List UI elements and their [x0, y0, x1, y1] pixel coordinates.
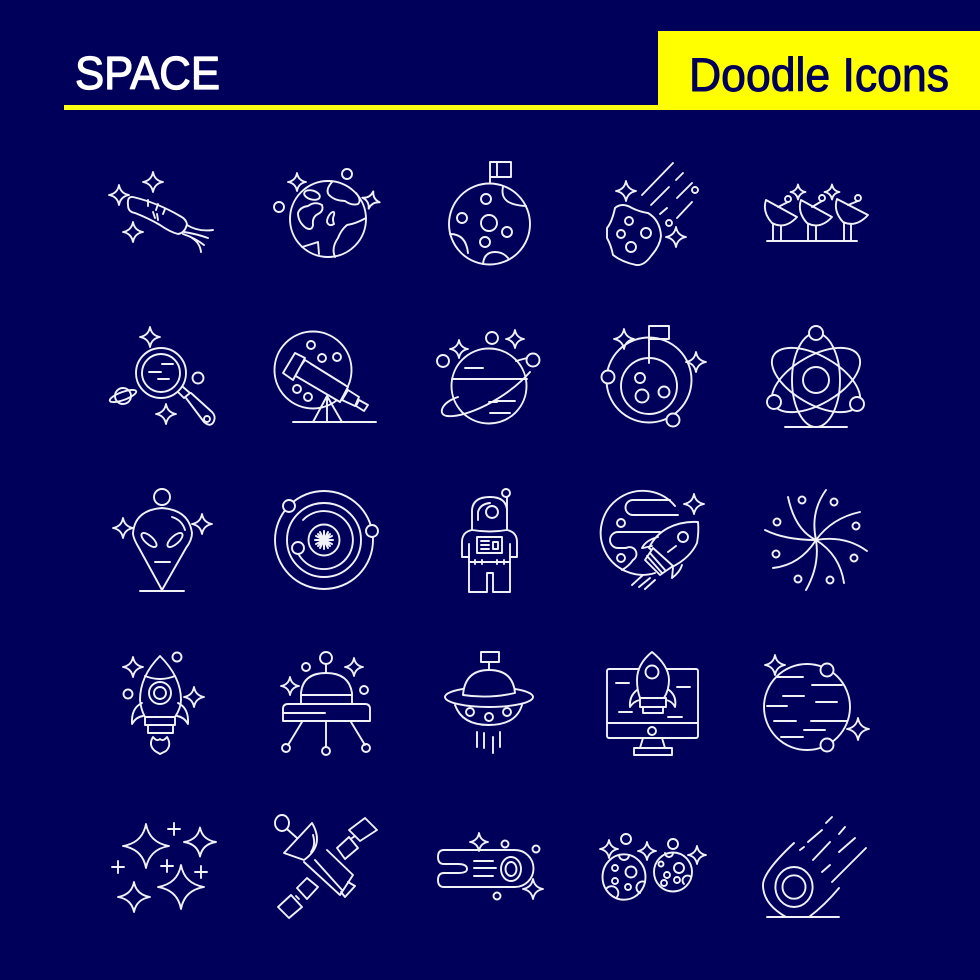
icon: radio telescopes [765, 184, 868, 241]
icon: solar system [275, 491, 378, 589]
icon: asteroid [607, 163, 698, 265]
icon: flying saucer with legs [281, 652, 370, 755]
subtitle: Doodle Icons: Doodle Icons [689, 48, 949, 101]
icon: telescope and moon [274, 332, 376, 422]
header band [64, 31, 980, 110]
icon: rocket launching past moon [601, 491, 704, 589]
icon: rocket on monitor [607, 652, 698, 755]
icon: twin cratered moons [600, 834, 706, 900]
icon: falling meteor [763, 817, 866, 917]
icon: astronaut [462, 489, 517, 592]
icon: planet with orbit and flag [602, 326, 706, 426]
icon: moon with flag [449, 162, 530, 264]
icon: magnifier searching space [108, 327, 215, 425]
icon: comet capsule [438, 833, 543, 900]
icon: alien head [113, 489, 212, 591]
icon: star cluster [112, 823, 216, 912]
icon: spiral galaxy [765, 490, 867, 590]
icon: ringed planet [437, 330, 540, 424]
icon: rocket with flame [123, 652, 204, 754]
icon: earth [274, 169, 382, 257]
title: SPACE: SPACE [75, 47, 220, 99]
yellow underline bar [64, 105, 664, 110]
icon: satellite [275, 815, 377, 918]
icon: atom [762, 326, 870, 427]
icon: ufo with flag [445, 652, 533, 753]
icon: striped planet [764, 655, 869, 752]
subtitle panel [658, 31, 980, 110]
icon: comet bacteria with stars [109, 172, 213, 252]
